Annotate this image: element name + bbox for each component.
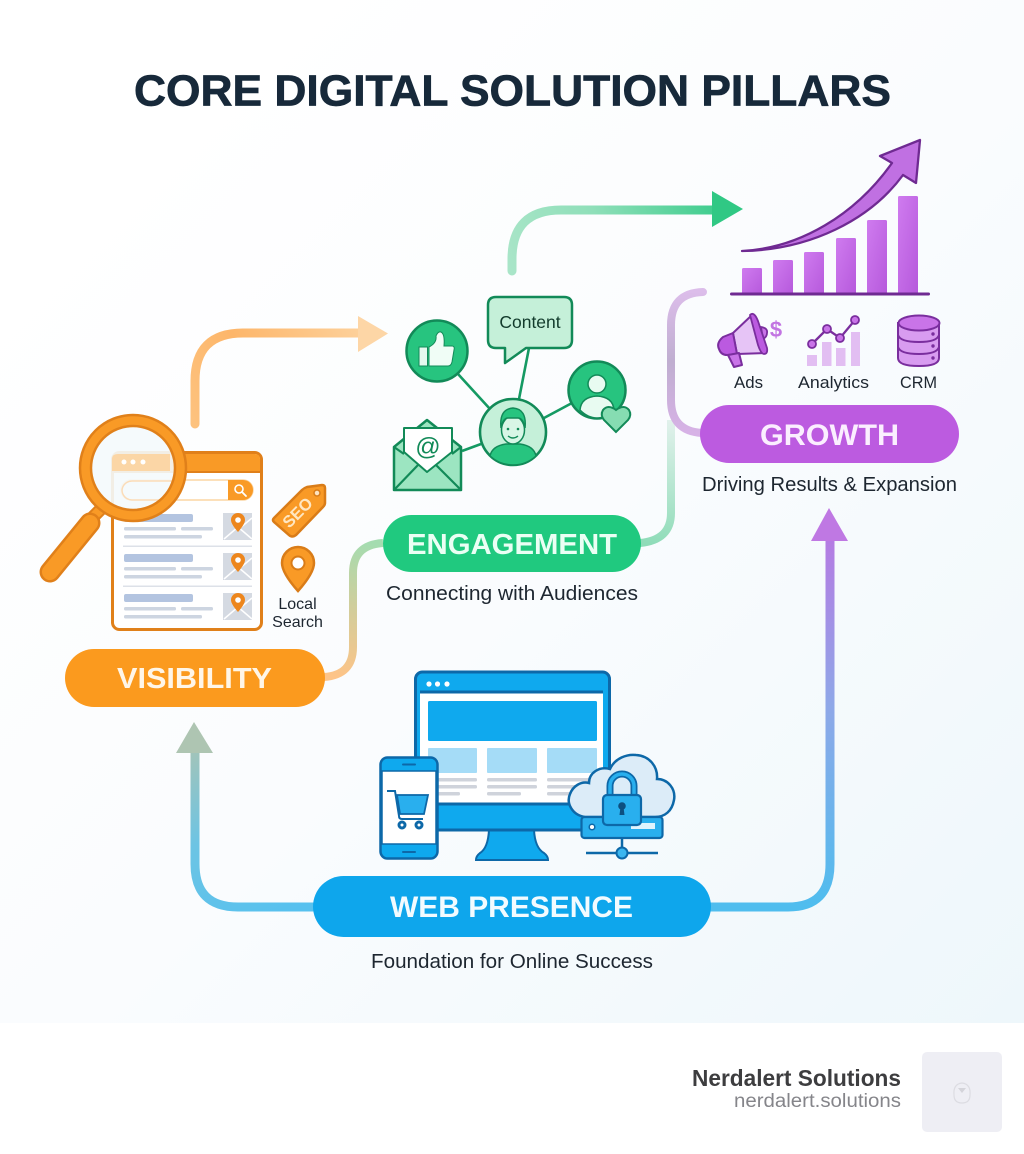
footer: brand name: Nerdalert Solutions	[692, 1065, 901, 1091]
text: growth caption: Driving Results & Expansion	[702, 474, 957, 496]
pill: growth: GROWTH	[760, 419, 899, 452]
pill: visibility	[65, 649, 325, 707]
arrow: visibility up to engagement	[195, 316, 388, 424]
icon: email envelope: @	[415, 433, 441, 461]
icon: thumbs up	[406, 320, 468, 382]
connector: engagement rising	[640, 420, 671, 543]
label: ads: Ads	[734, 374, 763, 392]
text: engagement caption: Connecting with Audiences	[386, 583, 638, 605]
icon: analytics	[807, 316, 860, 366]
arrow: web presence to growth	[710, 508, 848, 907]
arrow: web presence to visibility	[176, 722, 315, 907]
label: local search: Search	[272, 614, 323, 631]
icon: ads megaphone	[718, 314, 782, 367]
chart: growth bars with trend arrow	[730, 140, 930, 296]
footer: brand url: nerdalert.solutions	[734, 1091, 901, 1112]
connector: growth loop	[671, 292, 703, 433]
arrow: engagement up to growth	[512, 191, 743, 271]
icon: SEO tag: SEO	[279, 494, 317, 532]
result row three	[124, 593, 252, 620]
connector: visibility to engagement	[324, 543, 383, 677]
icon: engagement network	[394, 297, 630, 490]
footer: logo placeholder	[922, 1052, 1002, 1132]
label: CRM: CRM	[900, 374, 937, 392]
cloud lock server	[569, 755, 674, 858]
icon: content speech bubble	[488, 297, 572, 363]
title: CORE DIGITAL SOLUTION PILLARS	[134, 66, 891, 116]
monitor	[416, 672, 610, 860]
icon: CRM database	[898, 316, 940, 366]
magnifier	[50, 415, 186, 572]
text: web presence caption: Foundation for Online Success	[371, 951, 653, 973]
browser window	[112, 452, 262, 630]
icon: profile with heart	[568, 362, 630, 432]
icon: ads megaphone: $	[770, 317, 782, 342]
icon: email envelope	[394, 420, 461, 490]
icon: local search pin	[282, 547, 314, 591]
icon: content speech bubble: Content	[499, 312, 561, 332]
pill: growth	[700, 405, 959, 463]
bars	[742, 196, 918, 294]
pill: web presence	[313, 876, 711, 937]
label: local search: Local	[278, 596, 317, 613]
icon: browser search results with magnifier	[50, 415, 262, 630]
icon: web presence devices	[380, 672, 674, 860]
pill: web presence: WEB PRESENCE	[390, 891, 633, 924]
network links	[458, 348, 572, 451]
pill: visibility: VISIBILITY	[117, 663, 272, 695]
icon: person centre	[480, 399, 546, 465]
trend arrow	[742, 140, 920, 251]
result row two	[124, 553, 252, 580]
pill: engagement	[383, 515, 641, 572]
result row one	[124, 513, 252, 540]
pill: engagement: ENGAGEMENT	[407, 529, 617, 561]
label: analytics: Analytics	[798, 374, 869, 392]
icon: SEO tag	[273, 485, 325, 536]
phone with cart	[380, 758, 438, 858]
